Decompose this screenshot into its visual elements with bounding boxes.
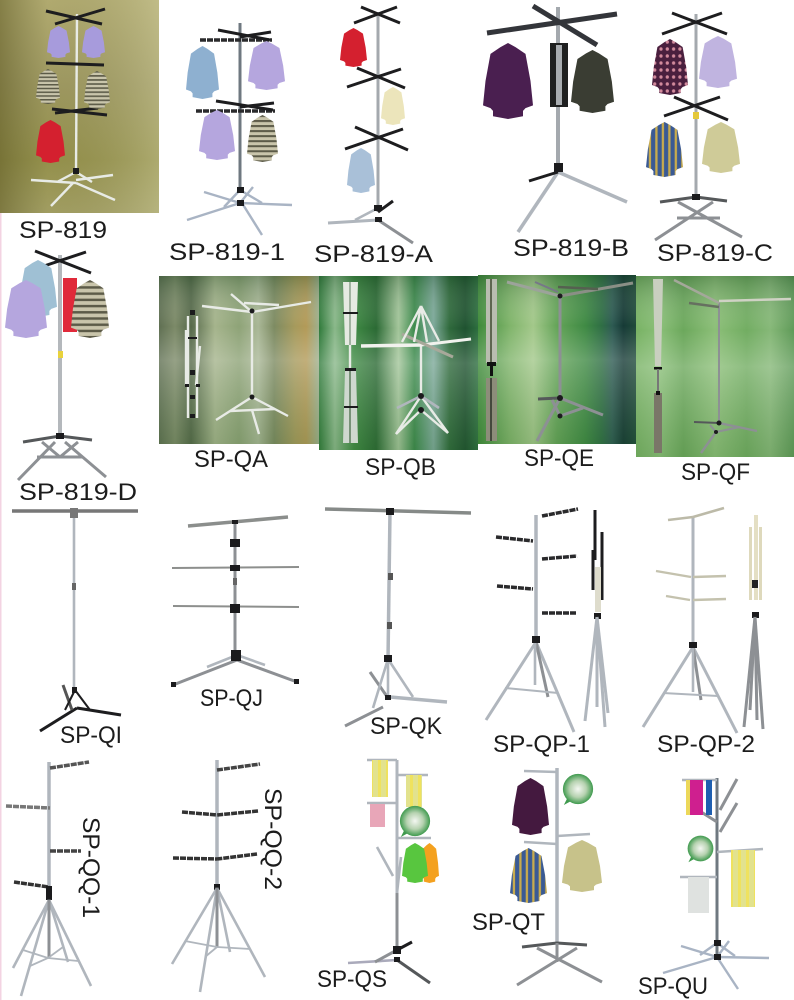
product: SP-QB xyxy=(319,276,478,481)
folded rack xyxy=(585,510,608,727)
product: SP-819-D xyxy=(5,251,137,506)
open rack xyxy=(361,306,471,434)
label: SP-QP-2 xyxy=(657,731,755,758)
label: SP-QA xyxy=(194,446,268,473)
open rack xyxy=(674,280,791,453)
label: SP-819-B xyxy=(513,235,629,262)
folded rack xyxy=(185,310,200,418)
label: SP-819 xyxy=(19,217,107,244)
label: SP-QF xyxy=(681,459,750,486)
rack xyxy=(517,768,602,985)
label: SP-819-1 xyxy=(169,239,285,266)
rack xyxy=(328,7,413,243)
label: SP-QB xyxy=(365,454,436,481)
photo background xyxy=(159,276,319,444)
icon: speech bubble xyxy=(688,836,713,862)
product: SP-QI xyxy=(12,508,138,749)
product: SP-QA xyxy=(159,276,319,473)
clothes xyxy=(36,26,110,163)
clothes xyxy=(5,260,109,338)
product: SP-QQ-2 xyxy=(172,760,286,992)
rack xyxy=(487,6,627,232)
product: SP-QJ xyxy=(171,517,299,712)
label: SP-QT xyxy=(472,909,545,936)
label: SP-QJ xyxy=(200,685,263,712)
clothes xyxy=(483,43,614,119)
label: SP-819-D xyxy=(19,479,137,506)
photo background xyxy=(0,0,159,213)
rack xyxy=(187,23,292,235)
rack xyxy=(663,778,769,989)
product: SP-QP-2 xyxy=(643,508,763,758)
photo background xyxy=(478,275,636,444)
towels xyxy=(370,760,422,827)
product: SP-QQ-1 xyxy=(6,762,104,996)
label: SP-QU xyxy=(638,973,708,1000)
clothes xyxy=(646,36,740,177)
photo background xyxy=(636,276,794,457)
clothes xyxy=(186,41,285,162)
rack xyxy=(6,762,91,996)
rack xyxy=(18,251,106,480)
folded rack xyxy=(486,279,497,441)
clothes xyxy=(340,28,405,193)
product: SP-819-A xyxy=(314,7,433,268)
product: SP-QP-1 xyxy=(486,509,608,758)
label: SP-QK xyxy=(370,713,442,740)
label: SP-QS xyxy=(317,966,387,993)
folded rack xyxy=(744,515,763,729)
product: SP-819-1 xyxy=(169,23,292,266)
rack xyxy=(325,508,471,726)
label: SP-QP-1 xyxy=(493,731,590,758)
open rack xyxy=(202,294,311,434)
photo background xyxy=(319,276,478,450)
rack xyxy=(31,9,115,206)
label: SP-QI xyxy=(60,722,122,749)
label: SP-QQ-2 xyxy=(259,788,286,890)
towels xyxy=(686,780,755,913)
product: SP-QK xyxy=(325,508,471,740)
product: SP-QF xyxy=(636,276,794,486)
label: SP-QQ-1 xyxy=(77,817,104,918)
rack xyxy=(172,760,265,992)
product: SP-QU xyxy=(638,778,769,1000)
rack xyxy=(171,517,299,687)
icon: speech bubble xyxy=(563,774,593,805)
label: SP-QE xyxy=(524,445,594,472)
label: SP-819-A xyxy=(314,241,433,268)
icon: speech bubble xyxy=(400,806,430,837)
product: SP-819-C xyxy=(646,13,773,267)
shirts xyxy=(402,843,439,883)
rack xyxy=(348,760,431,983)
label: SP-819-C xyxy=(657,240,773,267)
folded rack xyxy=(343,282,358,443)
rack xyxy=(655,13,742,240)
folded rack xyxy=(653,279,663,453)
open rack xyxy=(486,509,578,732)
product: SP-819 xyxy=(0,0,159,244)
open rack xyxy=(643,508,737,733)
open rack xyxy=(507,282,633,441)
product: SP-QT xyxy=(472,768,602,985)
product: SP-819-B xyxy=(483,6,629,262)
product: SP-QS xyxy=(317,760,439,993)
clothes xyxy=(510,778,602,903)
product: SP-QE xyxy=(478,275,636,472)
rack xyxy=(12,508,138,731)
